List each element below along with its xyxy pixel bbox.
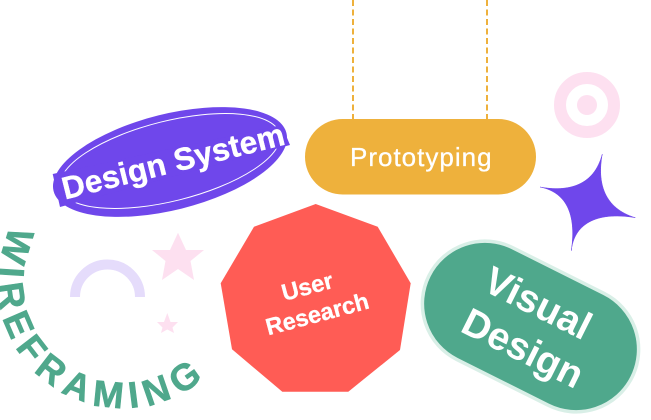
- panel: visual design pill: [401, 220, 651, 420]
- panel: user research nonagon: Research: [263, 288, 372, 340]
- panel: design system badge: Design System: [58, 116, 288, 206]
- panel: prototyping pill: Prototyping: [350, 142, 493, 172]
- panel: user research nonagon: [221, 204, 411, 392]
- panel: user research nonagon: User: [279, 267, 336, 306]
- panel: visual design pill: Design: [455, 300, 590, 397]
- icon: purple sparkle: [540, 154, 635, 251]
- icon: large pink star: [152, 233, 204, 280]
- panel: prototyping pill: [305, 119, 536, 194]
- icon: lavender half ring: [75, 264, 140, 297]
- panel: design system badge: [42, 86, 298, 238]
- icon: small pink star: [157, 313, 178, 333]
- icon: target ring: [560, 78, 614, 132]
- panel: visual design pill: Visual: [477, 259, 598, 349]
- dashed hanging strings: [353, 0, 487, 119]
